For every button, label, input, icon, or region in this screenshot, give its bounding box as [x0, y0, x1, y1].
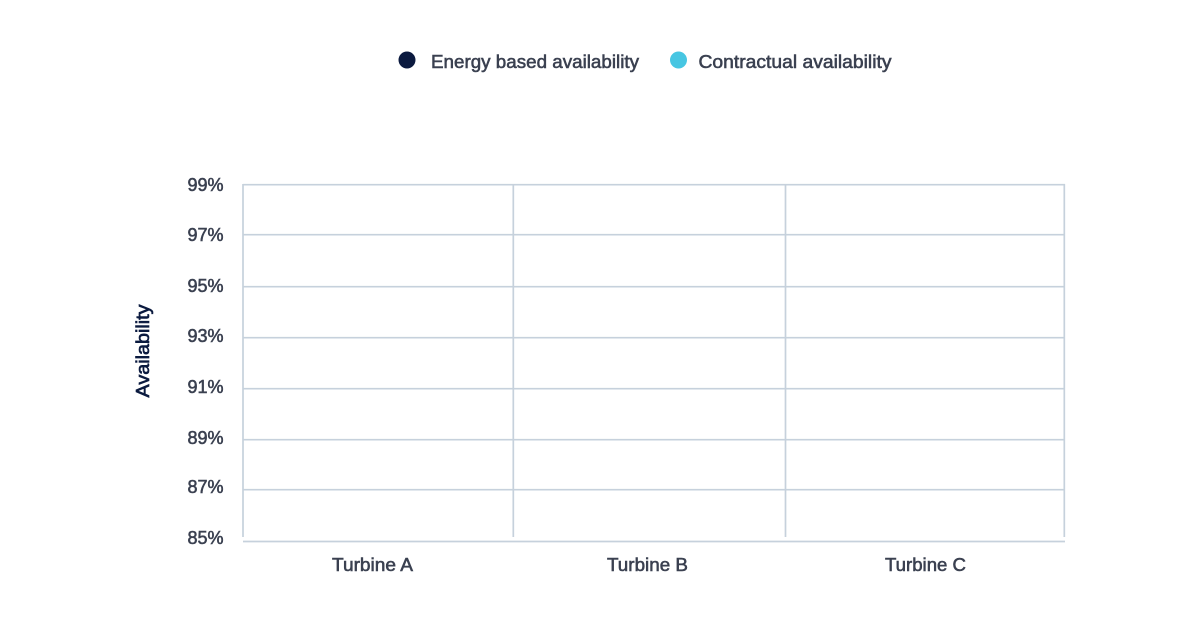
y axis labels: 89% — [187, 428, 224, 448]
y axis labels: 97% — [187, 225, 224, 245]
x axis labels: Turbine A — [332, 555, 413, 575]
chart: availability by turbine — [133, 175, 1065, 575]
y axis labels: 87% — [187, 477, 224, 497]
y axis labels: 93% — [187, 326, 224, 346]
x axis labels: Turbine C — [885, 555, 966, 575]
grid — [243, 184, 1065, 542]
y axis title: Availability — [133, 304, 153, 398]
x axis labels — [332, 555, 966, 575]
y axis labels: 91% — [187, 377, 224, 397]
y axis labels: 85% — [187, 528, 224, 548]
x axis labels: Turbine B — [607, 555, 688, 575]
legend item: energy based availability: Energy based availability — [431, 52, 639, 72]
y axis labels: 99% — [187, 175, 224, 195]
legend — [398, 52, 892, 72]
y axis labels: 95% — [187, 276, 224, 296]
legend item: contractual availability: Contractual availability — [698, 52, 892, 72]
y axis labels — [187, 175, 224, 548]
